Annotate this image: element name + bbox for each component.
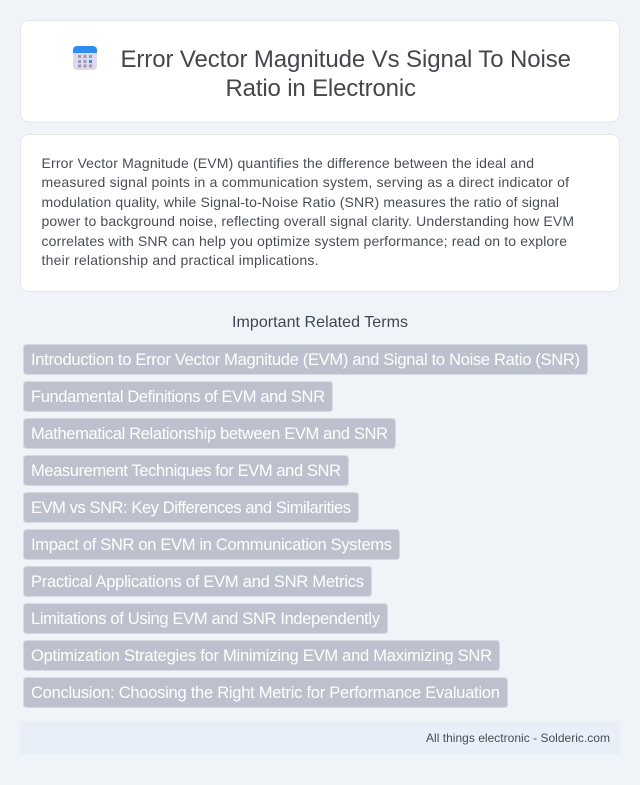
term 1: Introduction to Error Vector Magnitude (EVM) and Signal to Noise Ratio (SNR) [31,351,580,369]
term 3: Mathematical Relationship between EVM and SNR [31,425,388,443]
term 9: Optimization Strategies for Minimizing EVM and Maximizing SNR [31,647,492,665]
term 1 [24,344,588,374]
term 3 [24,418,396,448]
heading: important related terms: Important Related Terms [232,314,408,331]
panel: title card [20,20,620,122]
term 5 [24,492,358,522]
text block: description: modulation quality, while Signal-to-Noise Ratio (SNR) measures the ratio of signal [42,194,559,210]
title [120,46,571,102]
title: Error Vector Magnitude Vs Signal To Noise [120,46,571,73]
term 8 [24,604,388,634]
term 4 [24,456,348,486]
term 7 [24,566,372,596]
term 10: Conclusion: Choosing the Right Metric for Performance Evaluation [31,684,500,702]
term 5: EVM vs SNR: Key Differences and Similarities [31,499,351,517]
term 2: Fundamental Definitions of EVM and SNR [31,388,325,406]
panel: related terms list [24,344,588,708]
term 6 [24,530,400,560]
icon: calendar grid [73,46,97,70]
title: Ratio in Electronic [226,75,416,102]
text block: description: their relationship and practical implications. [42,252,318,268]
term 7: Practical Applications of EVM and SNR Metrics [31,573,364,591]
term 8: Limitations of Using EVM and SNR Independently [31,610,381,628]
term 4: Measurement Techniques for EVM and SNR [31,462,341,480]
term 6: Impact of SNR on EVM in Communication Systems [31,536,392,554]
text block: description: Error Vector Magnitude (EVM) quantifies the difference between the ideal and [42,155,534,171]
text block: description [42,155,574,268]
text block: description: measured signal points in a communication system, serving as a direct indicator of [42,174,569,190]
term 9 [24,640,500,670]
text block: description: power to background noise, reflecting overall signal clarity. Understanding how EVM [42,213,574,229]
footer [20,721,620,754]
term 2 [24,382,332,412]
footer: All things electronic - Solderic.com [426,731,610,745]
term 10 [24,678,508,708]
text block: description: correlates with SNR can help you optimize system performance; read on to explore [42,233,567,249]
panel: description card [20,134,620,292]
